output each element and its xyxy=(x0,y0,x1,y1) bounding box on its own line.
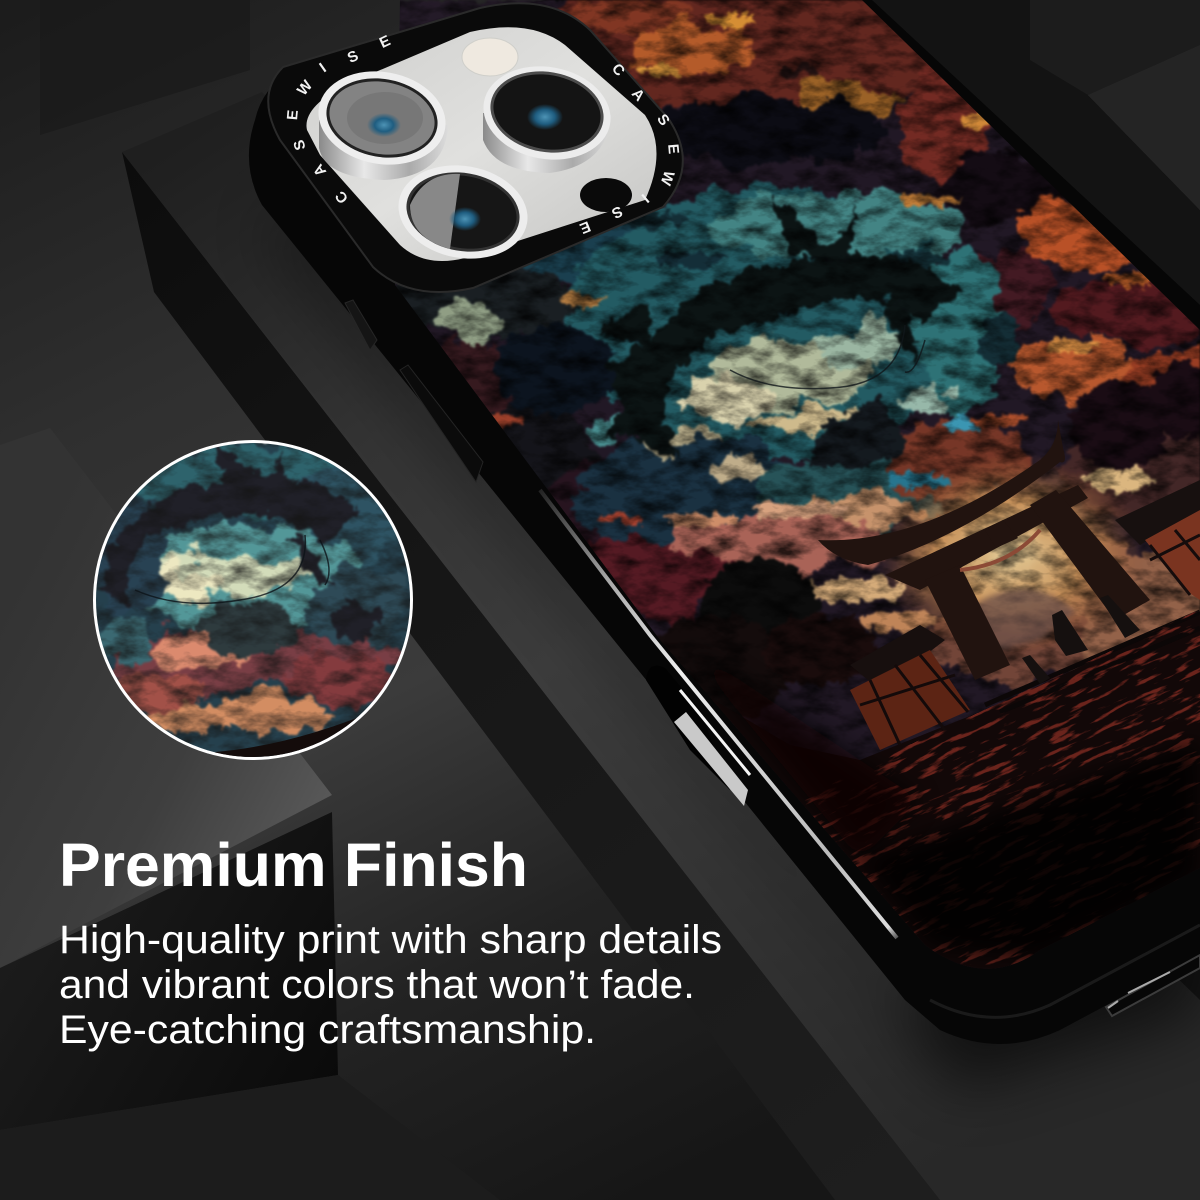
pilgrims silhouettes xyxy=(1022,595,1140,684)
main block side face xyxy=(122,152,940,1200)
torii gate xyxy=(818,420,1150,680)
CASEWISE rim lettering: E xyxy=(664,143,682,155)
cloud flecks xyxy=(480,14,1158,630)
description text xyxy=(59,918,722,1052)
phone artwork: dragon and torii xyxy=(395,0,1200,969)
mic hole xyxy=(580,178,632,212)
description text: and vibrant colors that won’t fade. xyxy=(59,963,695,1007)
phone case body xyxy=(249,0,1200,1044)
lava-like ground streaks xyxy=(805,611,1200,966)
CASEWISE rim lettering: E xyxy=(377,32,393,52)
dragon whiskers xyxy=(730,325,925,389)
CASEWISE rim lettering: C xyxy=(608,60,628,80)
lower left block top xyxy=(0,428,332,968)
camera island xyxy=(268,3,683,292)
small side port xyxy=(345,300,377,350)
bottom port xyxy=(1106,955,1200,1016)
ground bridge rail xyxy=(985,612,1200,712)
moon glow behind dragon xyxy=(434,307,960,479)
camera rim xyxy=(268,3,683,292)
zoomed whiskers xyxy=(135,535,329,603)
CASEWISE rim lettering: S xyxy=(345,47,361,67)
dragon silhouette xyxy=(495,195,965,470)
gloss highlight xyxy=(540,490,897,938)
case lower bevel xyxy=(930,925,1200,1017)
CASEWISE rim lettering: W xyxy=(656,168,677,188)
CASEWISE rim lettering: W xyxy=(294,76,317,99)
description text: High-quality print with sharp details xyxy=(59,918,722,962)
volume button xyxy=(400,365,483,482)
CASEWISE rim lettering: I xyxy=(638,190,652,206)
CASEWISE rim lettering xyxy=(284,32,682,237)
CASEWISE rim lettering: S xyxy=(290,138,310,152)
CASEWISE rim lettering: E xyxy=(284,109,302,121)
CASEWISE rim lettering: S xyxy=(609,202,625,222)
gate sunset glow xyxy=(875,455,1145,655)
ground xyxy=(728,614,1200,969)
screen bottom vignette xyxy=(860,740,1200,960)
artwork sky colour field xyxy=(390,0,1200,680)
CASEWISE rim lettering: C xyxy=(332,187,352,207)
CASEWISE rim lettering: S xyxy=(653,111,673,129)
top right blocks xyxy=(860,0,1200,340)
left dark tree fade xyxy=(742,698,925,866)
power button silver xyxy=(646,666,750,806)
CASEWISE rim lettering: A xyxy=(628,85,648,105)
shimenawa rope xyxy=(960,530,1040,570)
camera silver plate xyxy=(306,27,656,261)
torii roof tip xyxy=(215,718,357,757)
lens 3 xyxy=(391,155,535,269)
trees xyxy=(640,360,1200,725)
flash xyxy=(462,38,518,76)
shadow under phone xyxy=(270,210,1200,1090)
left shrine xyxy=(850,625,970,750)
description text: Eye-catching craftsmanship. xyxy=(59,1008,596,1052)
lens 2 xyxy=(476,57,618,173)
zoomed dragon xyxy=(100,445,377,640)
right shrine xyxy=(1115,480,1200,600)
detail magnifier circle xyxy=(90,440,420,770)
CASEWISE rim lettering: A xyxy=(310,161,330,179)
distant mountain between pillars xyxy=(968,589,1075,650)
lower left block front xyxy=(0,812,338,1130)
heading: Premium Finish xyxy=(59,831,528,899)
lens 1 xyxy=(311,62,453,180)
CASEWISE rim lettering: E xyxy=(577,217,593,237)
CASEWISE rim lettering: I xyxy=(316,60,330,76)
